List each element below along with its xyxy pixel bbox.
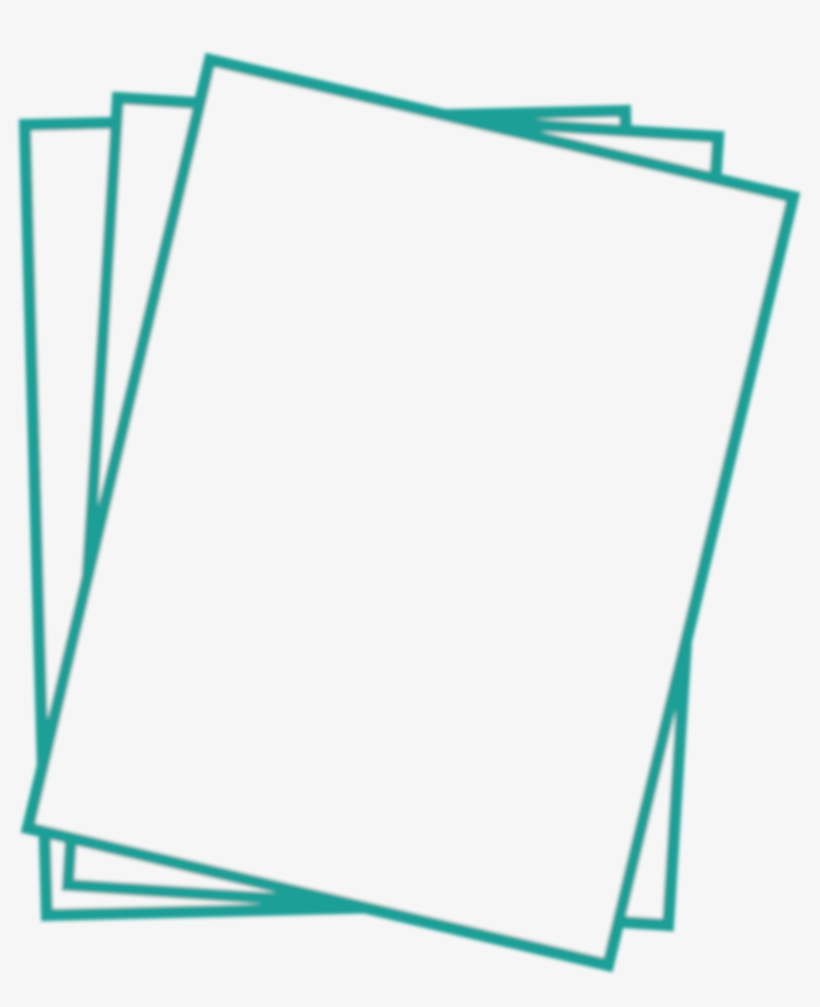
back sheet xyxy=(25,111,647,915)
middle sheet xyxy=(68,98,718,925)
